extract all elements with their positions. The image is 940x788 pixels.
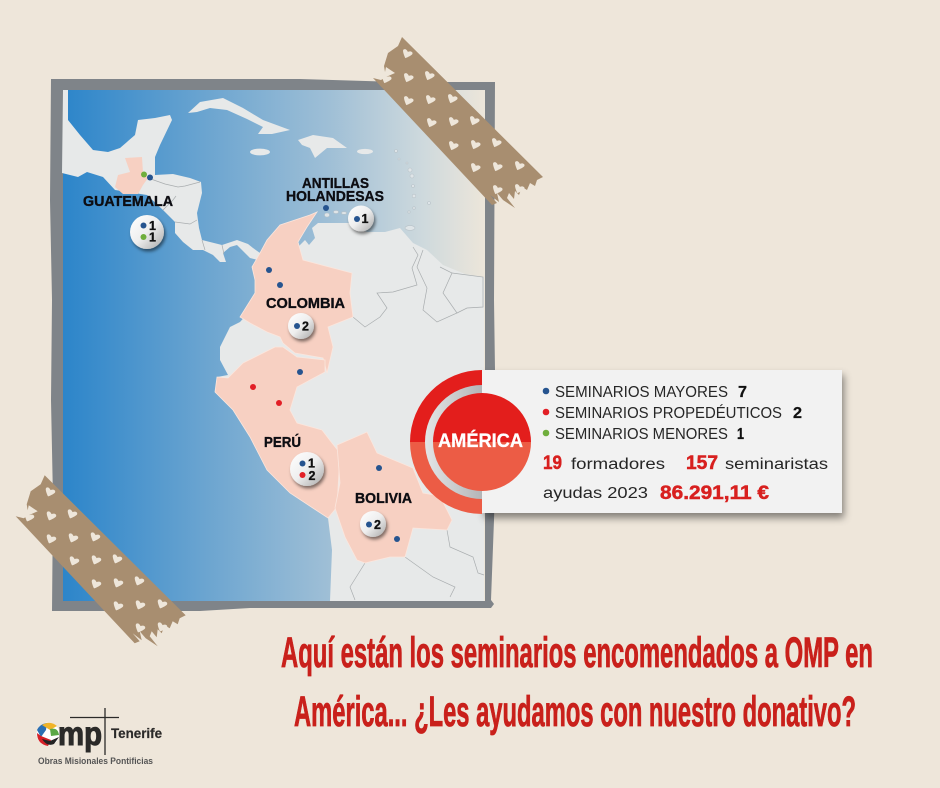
outer ring top half — [410, 370, 482, 442]
logo Tenerife: Tenerife — [111, 726, 162, 741]
Bolivia shape — [335, 432, 452, 563]
grey ring — [425, 385, 482, 499]
badge: Bolivia: 2 — [374, 518, 381, 532]
land: small islands — [324, 150, 430, 230]
stats: ayudas — [543, 483, 769, 504]
headline — [281, 629, 873, 736]
stats: formadores and seminaristas: 19 — [543, 453, 562, 474]
panel — [482, 370, 842, 513]
country borders — [148, 178, 484, 600]
land: Cuba — [188, 98, 290, 134]
label: Guatemala: GUATEMALA — [83, 194, 174, 210]
legend: menores: SEMINARIOS MENORES — [555, 426, 728, 443]
map location dots — [141, 172, 400, 542]
badge: Antillas: 1 — [362, 212, 368, 226]
legend: propedéuticos: 2 — [793, 405, 802, 422]
sea — [63, 90, 485, 601]
stats: ayudas: ayudas 2023 — [543, 485, 648, 502]
label: Antillas Holandesas — [286, 176, 384, 205]
land: Hispaniola — [298, 135, 347, 158]
land: Puerto Rico — [357, 149, 373, 154]
badge: Perú: 1 — [308, 456, 315, 470]
badge: Colombia: 2 — [302, 320, 309, 334]
region name: AMÉRICA — [438, 430, 523, 452]
badge: Antillas — [348, 206, 374, 232]
tape: bottom left — [16, 475, 186, 646]
label: Colombia: COLOMBIA — [266, 296, 346, 312]
label: Bolivia: BOLIVIA — [355, 491, 413, 507]
inner disc — [433, 393, 531, 491]
label: Antillas Holandesas: HOLANDESAS — [286, 189, 384, 205]
legend: menores: 1 — [737, 426, 744, 443]
badge: Bolivia — [360, 511, 386, 537]
Guatemala shape — [115, 157, 148, 194]
logo letters: mp — [58, 715, 102, 752]
legend: mayores: SEMINARIOS MAYORES — [555, 384, 728, 401]
legend: propedéuticos: SEMINARIOS PROPEDÉUTICOS — [555, 405, 782, 422]
stats: formadores and seminaristas — [543, 453, 828, 474]
badge: Perú: 2 — [308, 469, 316, 483]
logo: OMP Tenerife — [36, 708, 162, 767]
land: Jamaica — [250, 149, 270, 155]
badge: Guatemala: 1 — [149, 219, 156, 233]
label: Antillas Holandesas: ANTILLAS — [302, 176, 369, 192]
map frame — [50, 79, 496, 611]
badge: Guatemala: 1 — [149, 230, 156, 244]
stats: formadores and seminaristas: 157 — [686, 453, 718, 474]
logo globe — [36, 722, 60, 746]
land: Mexico and Central America — [62, 90, 260, 262]
badge: Colombia — [288, 313, 314, 339]
callout: América — [410, 370, 842, 514]
badge: Perú — [290, 452, 324, 486]
outer ring bottom half — [410, 442, 482, 514]
logo tagline: Obras Misionales Pontificias — [38, 756, 153, 767]
badge: Guatemala — [130, 215, 164, 249]
stats: ayudas: 86.291,11 € — [660, 483, 769, 504]
stats: formadores and seminaristas: seminaristas — [725, 456, 828, 473]
label: Perú: PERÚ — [264, 433, 301, 451]
map — [62, 90, 485, 601]
logo cross — [70, 708, 119, 755]
tape: top right — [373, 37, 543, 208]
stats: formadores and seminaristas: formadores — [571, 456, 665, 473]
Colombia shape — [240, 212, 353, 373]
legend: mayores: 7 — [738, 384, 747, 401]
Peru shape — [215, 347, 340, 518]
land: South America — [215, 223, 484, 601]
